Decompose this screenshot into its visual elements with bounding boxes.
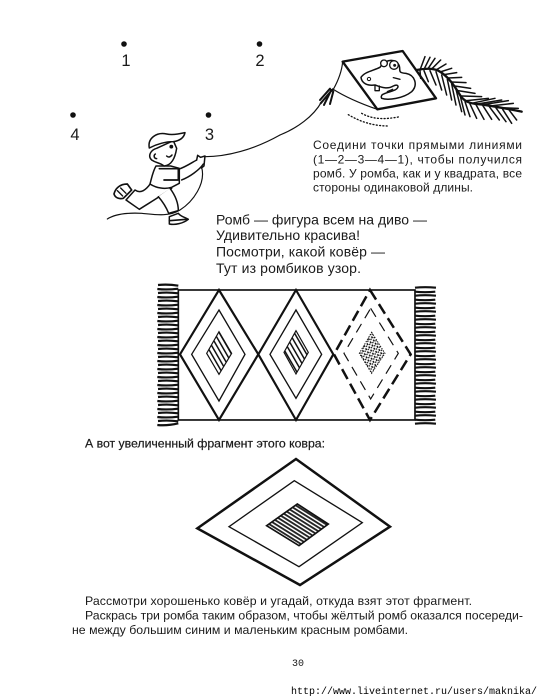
poem: Ромб — фигура всем на диво — (216, 212, 427, 228)
diamond three, dashed (334, 290, 411, 420)
kite string (280, 102, 322, 135)
front leg and shoe (158, 188, 178, 213)
string to kite (205, 135, 280, 157)
instruction text: Соедини точки прямыми линиями (313, 138, 522, 152)
instruction text: ромб. У ромба, как и у квадрата, все (313, 166, 522, 180)
enlarged carpet fragment (197, 459, 390, 585)
instruction text: (1—2—3—4—1), чтобы получился (313, 152, 522, 166)
illustration: kite tail (417, 57, 522, 123)
instruction text (313, 138, 522, 194)
torso and arm (150, 166, 179, 188)
instruction paragraph: не между большим синим и маленьким красным ромбами. (72, 623, 408, 637)
left fringe (157, 285, 178, 425)
illustration: crocodile kite (280, 51, 436, 135)
fragment caption: А вот увеличенный фрагмент этого ковра: (85, 436, 325, 450)
dot-to-dot points: 3 (205, 126, 214, 144)
crocodile head (361, 60, 415, 99)
dot-to-dot points (70, 41, 265, 144)
dot-to-dot points: 1 (121, 52, 131, 70)
diamond one (180, 290, 258, 420)
instruction paragraph: Раскрась три ромба таким образом, чтобы жёлтый ромб оказался посереди- (85, 608, 523, 622)
dot-to-dot points: 4 (70, 126, 80, 144)
kite frame (343, 51, 436, 109)
poem: Удивительно красива! (216, 227, 360, 243)
back leg and shoe (126, 183, 172, 209)
kite bridle and knot (333, 62, 377, 109)
watermark url: http://www.liveinternet.ru/users/maknika/ (291, 686, 537, 698)
instruction text: стороны одинаковой длины. (313, 180, 473, 194)
head and cap (150, 141, 177, 166)
poem: Посмотри, какой ковёр — (216, 244, 385, 260)
carpet border (178, 290, 415, 420)
diamond two (258, 290, 333, 420)
dot-to-dot points: 2 (255, 52, 265, 70)
instruction paragraph (72, 594, 523, 637)
motion dashes (348, 113, 400, 126)
page number: 30 (292, 659, 304, 670)
poem: Тут из ромбиков узор. (216, 260, 361, 276)
poem (216, 212, 427, 276)
carpet (157, 285, 436, 425)
string on ground (107, 167, 203, 219)
instruction paragraph: Рассмотри хорошенько ковёр и угадай, откуда взят этот фрагмент. (85, 594, 472, 608)
illustration: running boy (107, 133, 280, 224)
right fringe (415, 287, 436, 424)
